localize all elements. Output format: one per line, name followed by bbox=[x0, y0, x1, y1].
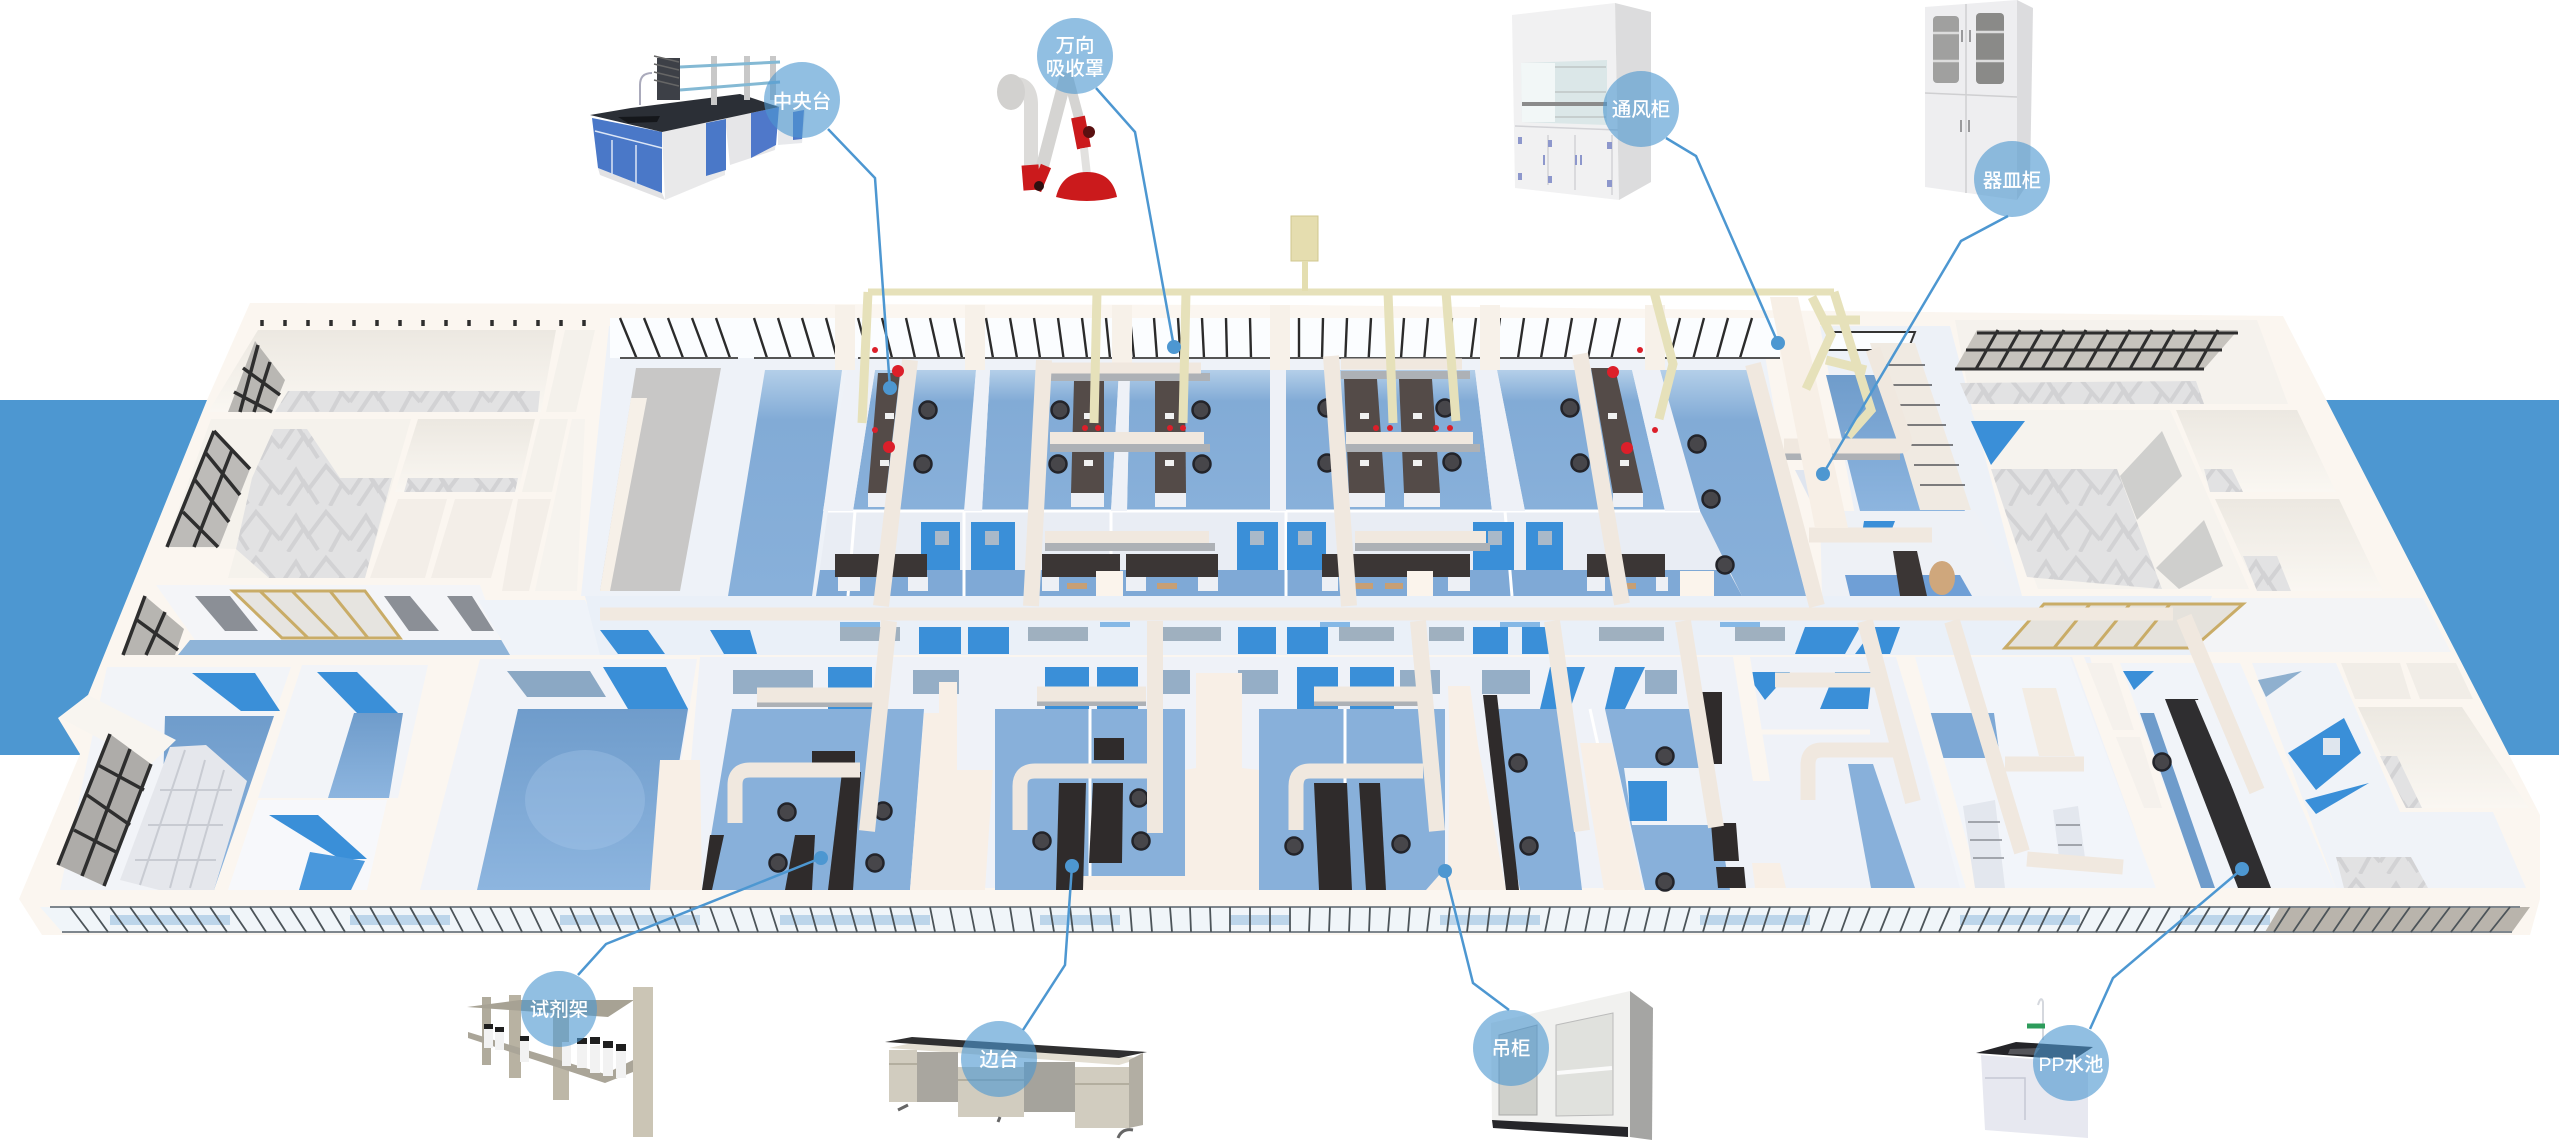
gold window right bbox=[2005, 604, 2243, 648]
lower lab rear wall and floors bbox=[680, 657, 2150, 890]
product: central bench bbox=[590, 56, 806, 200]
exhaust pipes bbox=[862, 292, 1871, 436]
floor plan building bbox=[19, 216, 2540, 935]
central white wall zone bbox=[581, 326, 1806, 596]
cream wall strips bbox=[1896, 657, 1980, 888]
left windows bbox=[123, 320, 584, 655]
callout: 边台: 边台 bbox=[979, 1049, 1019, 1071]
callout: 吊柜: 吊柜 bbox=[1491, 1038, 1531, 1060]
lower bench room walls and doors bbox=[816, 511, 1742, 596]
callout: 通风柜 bbox=[1603, 71, 1679, 147]
callout: 万向吸收罩 bbox=[1037, 18, 1113, 94]
grey floor room bbox=[600, 368, 721, 591]
lab glass cabinet stack bbox=[1795, 343, 1971, 540]
upper lab floors bbox=[728, 370, 1806, 596]
leader line: 器皿柜 bbox=[1816, 216, 2008, 481]
lower lab cream cabinets bbox=[650, 673, 1786, 890]
fume extraction arms bbox=[872, 347, 1658, 454]
product: PP sink bbox=[1976, 999, 2093, 1138]
bottom glass facade bbox=[40, 907, 2530, 932]
callout: PP水池: PP水池 bbox=[2038, 1054, 2104, 1076]
white glass cabinets bbox=[1963, 800, 2005, 888]
door room block bbox=[1624, 768, 1712, 825]
callout: 吊柜 bbox=[1473, 1010, 1549, 1086]
product: fume hood bbox=[1512, 3, 1651, 200]
product: side bench bbox=[885, 1037, 1147, 1138]
callout: 万向吸收罩: 万向 bbox=[1055, 35, 1095, 57]
corridor left wall bbox=[156, 585, 610, 655]
leader line: 边台 bbox=[1023, 859, 1079, 1030]
left storage rooms bbox=[165, 330, 595, 591]
chairs bbox=[770, 400, 2170, 890]
product: reagent rack bbox=[467, 987, 653, 1137]
callout: 器皿柜: 器皿柜 bbox=[1983, 170, 2041, 192]
lower left rooms bbox=[58, 665, 428, 890]
leader line: 中央台 bbox=[828, 129, 897, 395]
central corridor bbox=[585, 596, 2212, 655]
callout: 万向吸收罩: 吸收罩 bbox=[1046, 58, 1104, 80]
callout: 试剂架 bbox=[521, 971, 597, 1047]
product: glassware cabinet bbox=[1925, 0, 2033, 200]
lower room desks bbox=[835, 554, 1714, 596]
duct bodies bbox=[600, 608, 2173, 620]
lower lab benches bbox=[702, 692, 1746, 890]
leader line: 试剂架 bbox=[578, 851, 828, 975]
duct network bbox=[600, 297, 2257, 867]
product: universal fume arm bbox=[997, 73, 1117, 201]
right lower rooms bbox=[1733, 657, 2529, 888]
callout: 中央台: 中央台 bbox=[773, 91, 831, 113]
upper dividing walls bbox=[823, 370, 1700, 511]
building shell bbox=[19, 303, 2540, 935]
right upper block bbox=[1820, 326, 2022, 596]
callout: 通风柜: 通风柜 bbox=[1612, 99, 1670, 121]
callout: 器皿柜 bbox=[1974, 141, 2050, 217]
blue background band bbox=[0, 400, 2559, 755]
callout: 试剂架: 试剂架 bbox=[530, 999, 588, 1021]
leader line: 通风柜 bbox=[1666, 138, 1785, 350]
duct silver undersides bbox=[757, 375, 1900, 703]
upper bench counters bbox=[868, 368, 1643, 507]
leader line: 万向吸收罩 bbox=[1096, 88, 1181, 354]
callout: PP水池 bbox=[2033, 1025, 2109, 1101]
big blue room bbox=[420, 659, 697, 890]
top windows row bbox=[610, 305, 1780, 370]
callout: 边台 bbox=[961, 1021, 1037, 1097]
callout: 中央台 bbox=[764, 62, 840, 138]
right marble rooms bbox=[1955, 320, 2451, 652]
product: wall cabinet bbox=[1491, 991, 1653, 1140]
leader line: PP水池 bbox=[2090, 862, 2249, 1029]
ceiling junction box bbox=[1291, 216, 1318, 291]
leader line: 吊柜 bbox=[1438, 864, 1509, 1010]
